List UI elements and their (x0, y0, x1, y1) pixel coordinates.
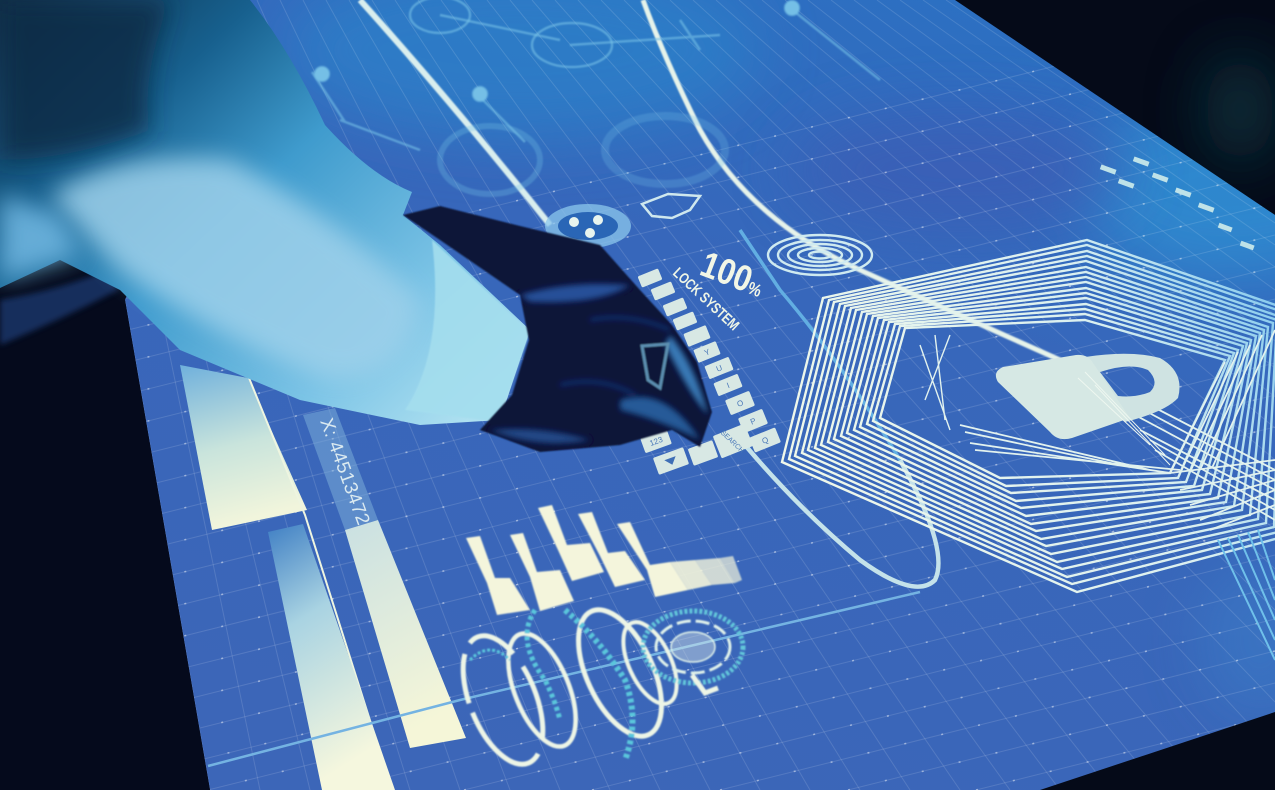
lock system label: LOCK SYSTEM (669, 264, 742, 334)
sleeve folds (0, 0, 420, 380)
long cream bar (345, 520, 466, 748)
shirt sleeve (0, 0, 530, 425)
bar chart (466, 505, 742, 615)
shirt cuff (405, 240, 530, 422)
icon: padlock (996, 354, 1180, 465)
on-screen keyboard: 123 (648, 435, 664, 448)
ring diagrams (460, 606, 746, 768)
white swoosh line (643, 0, 1060, 360)
on-screen keyboard: Y (703, 347, 712, 358)
on-screen keyboard: P (749, 416, 757, 427)
upper left swoosh (360, 0, 550, 225)
on-screen keyboard: Q (761, 435, 770, 446)
on-screen keyboard: SEARCH (719, 430, 745, 455)
icon: fingerprint (768, 235, 872, 275)
figure: belt highlight (0, 268, 118, 345)
horizontal axis line (208, 592, 920, 766)
on-screen keyboard: I (725, 381, 731, 390)
hexagon line pattern (782, 240, 1275, 592)
figure: dark trousers (0, 262, 210, 790)
on-screen keyboard: U (715, 363, 724, 374)
hand (403, 206, 712, 452)
lower left bar (268, 524, 395, 790)
blue fan lines at lower right (1218, 530, 1275, 660)
node circle (545, 204, 631, 248)
curve with loop (745, 445, 938, 587)
serial number strip: X: 44513472 (315, 416, 373, 528)
on-screen keyboard (638, 268, 781, 475)
100% heading: 100% (695, 244, 771, 306)
on-screen keyboard: O (736, 398, 745, 409)
icon: hand outline (642, 194, 700, 218)
crossing fan lines (920, 330, 1275, 530)
tick marks top right (1100, 156, 1255, 250)
background glow top right (1205, 55, 1275, 165)
faint upper part of loop (740, 230, 900, 460)
faded circuit graphics (312, 0, 880, 194)
left gradient panel (180, 365, 307, 530)
thin vertical rule (248, 378, 375, 732)
